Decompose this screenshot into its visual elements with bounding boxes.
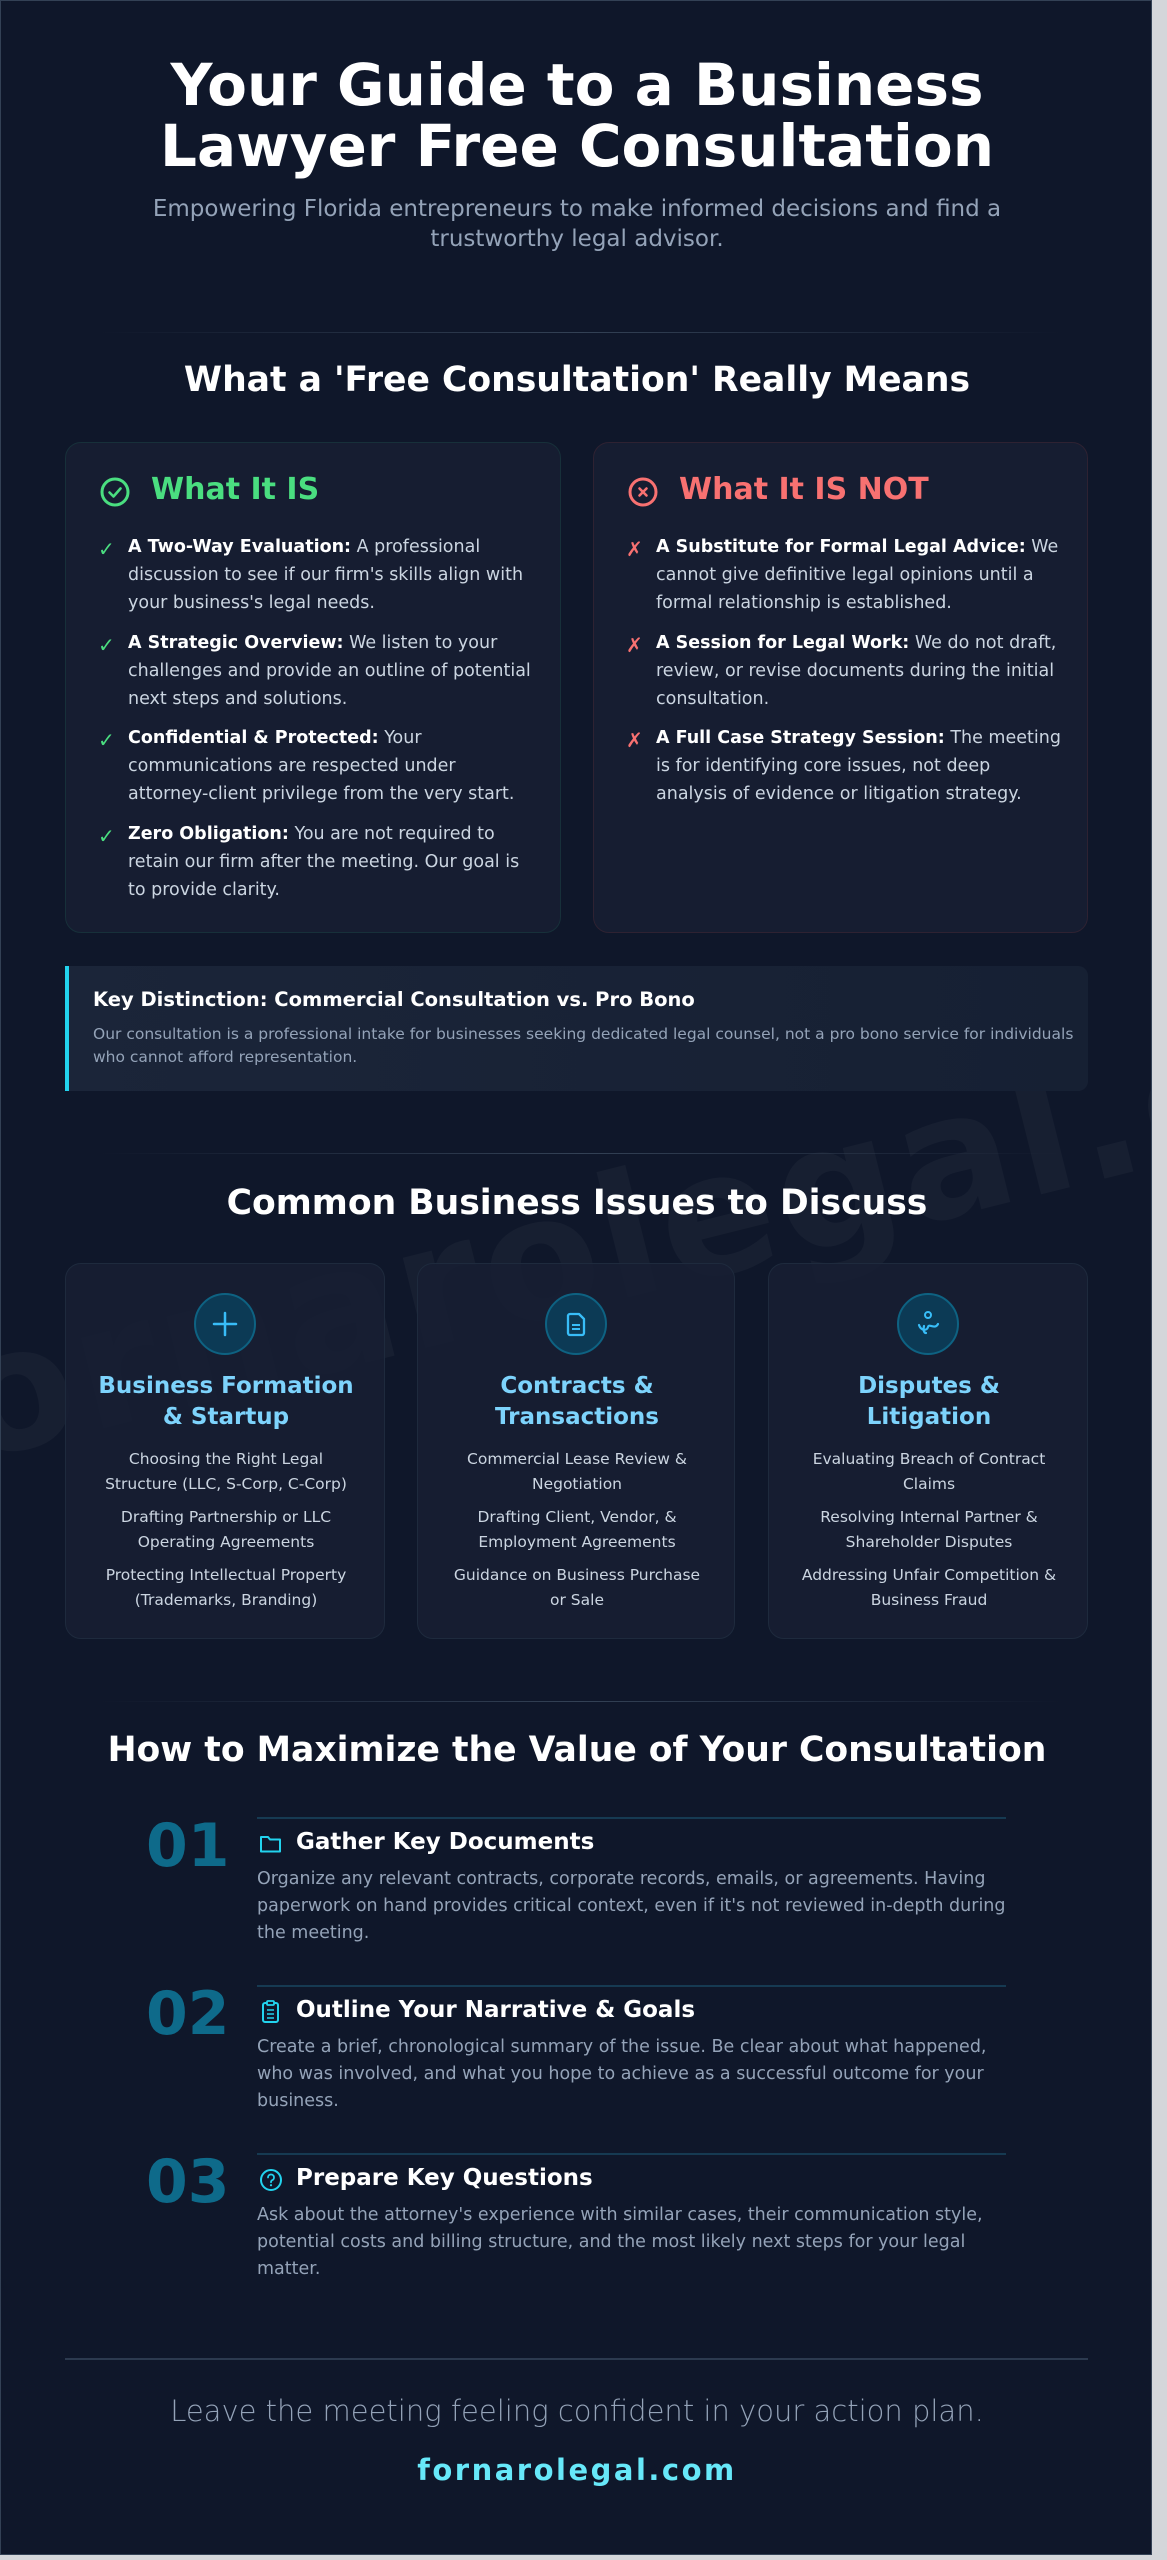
step 3: [146, 2147, 1006, 2279]
icon: check circle: [100, 478, 130, 506]
footer tagline: Leave the meeting feeling confident in your action plan.: [170, 2394, 984, 2428]
card list: [802, 1450, 1056, 1608]
card title: Transactions: [495, 1404, 659, 1430]
item: zero obligation: Zero Obligation: You are not required to retain our firm after the meeting. Our goal is to provide clarity.: [128, 824, 519, 900]
card list: Drafting Partnership or LLC Operating Agreements: [121, 1508, 331, 1550]
card list: Choosing the Right Legal Structure (LLC, S-Corp, C-Corp): [105, 1450, 347, 1492]
panel: what it is: ✓: [98, 537, 115, 561]
item: legal work: A Session for Legal Work: We do not draft, review, or revise documents during the initial consultation.: [656, 633, 1056, 709]
panel: what it is not: ✗: [626, 537, 643, 561]
panel: what it is not: [593, 442, 1088, 933]
card list: Guidance on Business Purchase or Sale: [454, 1566, 700, 1608]
panel: what it is not: ✗: [626, 728, 643, 752]
item: two-way evaluation: A Two-Way Evaluation: A professional discussion to see if our firm's skills align with your business's legal needs.: [128, 537, 523, 613]
card title: [98, 1373, 354, 1430]
callout text: Our consultation is a professional intake for businesses seeking dedicated legal counsel, not a pro bono service for individuals who cannot afford representation.: [93, 1025, 1073, 1066]
item: confidential: Confidential & Protected: Your communications are respected under attorney-client privilege from the very start.: [128, 728, 514, 804]
item: full case strategy: A Full Case Strategy Session: The meeting is for identifying core issues, not deep analysis of evidence or litigation strategy.: [656, 728, 1061, 804]
item: strategic overview: A Strategic Overview: We listen to your challenges and provide an outline of potential next steps and solutions.: [128, 633, 531, 709]
icon: plus: [194, 1293, 256, 1355]
icon: document: [545, 1293, 607, 1355]
panel: what it is: ✓: [98, 824, 115, 848]
card list: Addressing Unfair Competition & Business Fraud: [802, 1566, 1056, 1608]
card title: [858, 1373, 1000, 1430]
card list: Resolving Internal Partner & Shareholder Disputes: [820, 1508, 1038, 1550]
heading: what it is: What It IS: [151, 472, 319, 507]
card title: [495, 1373, 659, 1430]
icon: question: [260, 2169, 282, 2191]
icon: clipboard: [262, 2000, 279, 2023]
card title: & Startup: [163, 1404, 289, 1430]
card title: Contracts &: [500, 1373, 654, 1399]
heading: what it is not: What It IS NOT: [679, 472, 929, 507]
step heading: Prepare Key Questions: [296, 2165, 593, 2191]
panel: what it is: [65, 442, 561, 933]
title: Lawyer Free Consultation: [160, 112, 994, 180]
card list: Evaluating Breach of Contract Claims: [813, 1450, 1045, 1492]
step 1: [146, 1811, 1006, 1943]
card list: Commercial Lease Review & Negotiation: [467, 1450, 687, 1492]
title: [160, 51, 994, 180]
step heading: Outline Your Narrative & Goals: [296, 1997, 695, 2023]
heading: maximize value: How to Maximize the Value of Your Consultation: [108, 1730, 1046, 1770]
callout heading: Key Distinction: Commercial Consultation vs. Pro Bono: [93, 988, 695, 1011]
panel: what it is: ✓: [98, 633, 115, 657]
heading: what a free consultation means: What a 'Free Consultation' Really Means: [184, 360, 970, 400]
card title: Business Formation: [98, 1373, 354, 1399]
card list: Protecting Intellectual Property (Trademarks, Branding): [106, 1566, 346, 1608]
title: Your Guide to a Business: [170, 51, 984, 119]
icon: x circle: [628, 478, 658, 506]
footer url: fornarolegal.com: [417, 2453, 737, 2487]
heading: common business issues: Common Business Issues to Discuss: [227, 1183, 927, 1223]
icon: folder: [260, 1836, 281, 1852]
number 03: 03: [146, 2147, 230, 2217]
card title: Disputes &: [858, 1373, 1000, 1399]
card list: [105, 1450, 347, 1608]
card title: Litigation: [867, 1404, 991, 1430]
step heading: Gather Key Documents: [296, 1829, 594, 1855]
step text: Create a brief, chronological summary of the issue. Be clear about what happened, who was involved, and what you hope to achieve as a successful outcome for your business.: [257, 2037, 986, 2111]
item: substitute: A Substitute for Formal Legal Advice: We cannot give definitive legal opinions until a formal relationship is established.: [656, 537, 1058, 613]
subtitle: Empowering Florida entrepreneurs to make informed decisions and find a trustworthy legal advisor.: [153, 196, 1001, 252]
step text: Ask about the attorney's experience with similar cases, their communication style, potential costs and billing structure, and the most likely next steps for your legal matter.: [257, 2205, 983, 2279]
number 02: 02: [146, 1979, 230, 2049]
number 01: 01: [146, 1811, 230, 1881]
step text: Organize any relevant contracts, corporate records, emails, or agreements. Having paperwork on hand provides critical context, even if it's not reviewed in-depth during the meeting.: [257, 1869, 1006, 1943]
panel: disputes: [768, 1263, 1088, 1639]
callout: key distinction: [65, 966, 1088, 1091]
step 2: [146, 1979, 1006, 2111]
card list: Drafting Client, Vendor, & Employment Agreements: [477, 1508, 677, 1550]
icon: scale: [897, 1293, 959, 1355]
panel: what it is not: ✗: [626, 633, 643, 657]
panel: contracts: [417, 1263, 735, 1639]
panel: what it is: ✓: [98, 728, 115, 752]
card list: [454, 1450, 700, 1608]
panel: business formation: [65, 1263, 385, 1639]
